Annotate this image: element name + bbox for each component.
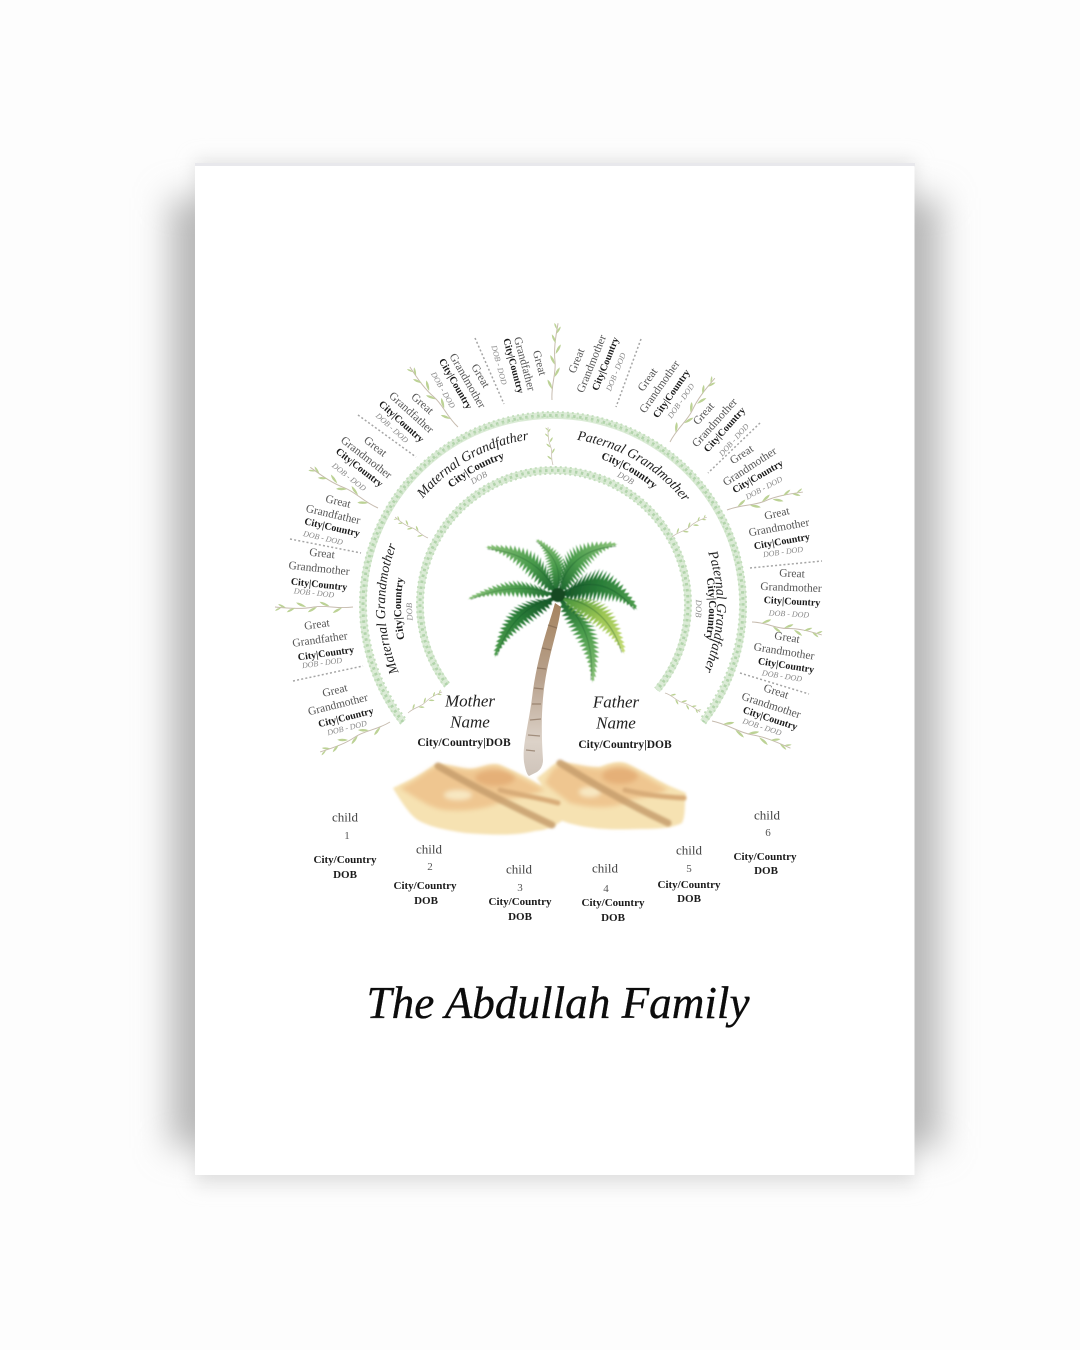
great grandparent 15: Great <box>773 630 801 646</box>
great grandparent 5 <box>330 434 394 493</box>
great grandparent 6: DOB - DOD <box>373 410 410 445</box>
poster shadow <box>170 160 940 1185</box>
great grandparent 15: City|Country <box>757 656 815 676</box>
great grandparent 14: Great <box>779 568 806 580</box>
great grandparent 7: City|Country <box>436 357 474 411</box>
great grandparent 12: Great <box>728 443 757 467</box>
child 1: 1 <box>344 830 350 842</box>
grandparent: maternal grandmother: City|Country <box>394 578 406 640</box>
grandparent: maternal grandfather: DOB <box>470 472 488 484</box>
child 3: DOB <box>508 911 533 923</box>
child 2: DOB <box>414 895 439 907</box>
great grandparent 8: City|Country <box>500 337 526 395</box>
child 4: child <box>592 860 618 876</box>
child 2: child <box>416 842 442 856</box>
parent: mother: City/Country|DOB <box>417 737 511 749</box>
grandparent: paternal grandmother: City|Country <box>602 453 657 488</box>
parent: mother: Name <box>449 712 490 732</box>
grandparent: maternal grandmother <box>376 543 413 674</box>
child 1: DOB <box>333 869 358 881</box>
great grandparent 14: Grandmother <box>760 581 822 595</box>
grandparent: paternal grandmother: Paternal Grandmother <box>576 431 689 500</box>
great grandparent 11: City|Country <box>702 405 748 455</box>
child 4: 4 <box>603 883 609 895</box>
grandparent: maternal grandfather: City|Country <box>448 454 503 486</box>
palm trunk <box>524 603 561 776</box>
great grandparent 8: Grandfather <box>511 336 537 393</box>
great grandparent 11: Great <box>691 400 718 428</box>
great grandparent 14: DOB - DOD <box>768 608 810 620</box>
great grandparent 2 <box>292 617 355 670</box>
great grandparent 2: City|Country <box>297 645 355 663</box>
great grandparent 14: City|Country <box>763 595 821 609</box>
child 2 <box>394 842 457 907</box>
great grandparent 2: Great <box>304 617 331 633</box>
parent: father: Name <box>595 714 636 732</box>
great grandparent 2: Grandfather <box>292 630 349 650</box>
great grandparent 9: Great <box>567 346 588 375</box>
great grandparent 8 <box>489 336 548 395</box>
great grandparent 7 <box>428 351 492 411</box>
great grandparent 4 <box>301 493 362 547</box>
great grandparent 5: City|Country <box>333 446 385 490</box>
great grandparent 1: City|Country <box>317 706 375 730</box>
child 6 <box>734 808 797 877</box>
great grandparent 10: Great <box>636 365 661 394</box>
great grandparent 9: Grandmother <box>575 333 609 395</box>
grandparent: paternal grandfather: Paternal Grandfather <box>705 551 726 673</box>
child 5: City/Country <box>658 879 721 891</box>
child 4: DOB <box>601 912 626 924</box>
great grandparent 10: DOB - DOD <box>665 382 696 421</box>
grandparent: maternal grandmother: DOB <box>406 603 413 620</box>
great grandparent 11: Grandmother <box>690 396 740 450</box>
great grandparent 12: City|Country <box>731 458 785 496</box>
great grandparent 1: DOB - DOD <box>325 719 368 737</box>
child 5: child <box>676 842 702 858</box>
child 2: City/Country <box>394 880 457 892</box>
child 5: DOB <box>677 893 702 905</box>
great grandparent 13: Great <box>763 505 792 523</box>
great grandparent 8: Great <box>530 349 548 378</box>
great grandparent 16: Great <box>762 682 791 702</box>
child 6: City/Country <box>734 851 797 863</box>
parent: mother: Mother <box>444 692 495 710</box>
child 6: DOB <box>754 865 779 877</box>
child 5 <box>658 842 721 905</box>
great grandparent 9: City|Country <box>590 336 622 392</box>
great grandparent 9 <box>567 333 628 395</box>
child 2: 2 <box>427 861 433 873</box>
great grandparent 8: DOB - DOD <box>489 343 509 386</box>
great grandparent 12: Grandmother <box>721 445 779 489</box>
great grandparent 12 <box>721 443 785 502</box>
great grandparent 13 <box>748 505 811 559</box>
great grandparent 6: Grandfather <box>386 390 436 436</box>
great grandparent 13: DOB - DOD <box>761 545 804 559</box>
child 3: City/Country <box>489 896 552 908</box>
child 5: 5 <box>686 863 692 875</box>
sprig dividers <box>275 323 823 757</box>
child 3 <box>489 862 552 923</box>
great grandparent 3: DOB - DOD <box>292 586 335 600</box>
grandparent: paternal grandmother: DOB <box>616 472 634 484</box>
illustration: sand dunes <box>393 762 686 835</box>
great grandparent 15 <box>753 630 815 684</box>
great grandparent 16 <box>740 682 802 738</box>
illustration: palm tree <box>467 523 644 776</box>
great grandparent 16: City|Country <box>741 705 799 733</box>
poster card <box>195 163 915 1175</box>
palm fronds <box>467 523 644 685</box>
great grandparent 15: Grandmother <box>753 641 815 663</box>
dotted dividers <box>290 338 822 694</box>
great grandparent 4: City|Country <box>303 516 361 540</box>
great grandparent 10: Grandmother <box>637 358 683 416</box>
child 1 <box>314 810 377 881</box>
outer garland ring <box>360 412 746 724</box>
great grandparent 11: DOB - DOD <box>716 422 751 459</box>
title: The Abdullah Family <box>366 977 750 1028</box>
great grandparent 1: Great <box>321 682 350 700</box>
grandparent: paternal grandfather: DOB <box>696 600 702 618</box>
parent: father: City/Country|DOB <box>578 739 672 751</box>
great grandparent 16: DOB - DOD <box>740 716 783 738</box>
child 6: 6 <box>765 827 771 839</box>
great grandparent 10 <box>636 358 696 421</box>
family tree fan <box>275 323 822 756</box>
great grandparent 14 <box>760 568 822 620</box>
great grandparent 3: Great <box>309 547 336 561</box>
great grandparent 3: City|Country <box>290 577 348 593</box>
great grandparent 4: DOB - DOD <box>301 529 344 547</box>
child 3: 3 <box>517 882 523 894</box>
great grandparent 2: DOB - DOD <box>300 656 343 670</box>
great grandparent 3: Grandmother <box>288 560 350 578</box>
grandparent: maternal grandfather: Maternal Grandfather <box>417 433 528 499</box>
child 1: City/Country <box>314 854 377 866</box>
great grandparent 7: Great <box>468 362 492 391</box>
grandparent: maternal grandmother: Maternal Grandmother <box>376 543 399 674</box>
great grandparent 13: Grandmother <box>748 517 810 539</box>
great grandparent 7: Grandmother <box>446 351 488 411</box>
great grandparent 6: Great <box>408 391 436 418</box>
great grandparent 13: City|Country <box>753 532 811 552</box>
great grandparent 15: DOB - DOD <box>760 668 803 684</box>
great grandparent 12: DOB - DOD <box>743 474 784 502</box>
great grandparent 5: Great <box>361 434 389 460</box>
child 3: child <box>506 862 532 876</box>
child 4: City/Country <box>582 897 645 909</box>
great grandparent 1: Grandmother <box>307 692 369 718</box>
great grandparent 5: Grandmother <box>338 434 394 482</box>
grandparent: paternal grandfather: City|Country <box>704 578 716 640</box>
great grandparent 3 <box>288 547 350 600</box>
parent: father <box>578 692 672 751</box>
great grandparent 9: DOB - DOD <box>604 351 628 393</box>
inner garland ring <box>417 467 691 692</box>
great grandparent 6: City|Country <box>376 399 426 445</box>
great grandparent 16: Grandmother <box>740 691 802 721</box>
great grandparent 1 <box>307 682 375 737</box>
great grandparent 4: Grandfather <box>305 503 362 527</box>
child 4 <box>582 860 645 924</box>
parent: father: Father <box>592 692 640 712</box>
great grandparent 6 <box>373 390 436 445</box>
child 6: child <box>754 808 780 822</box>
child 1: child <box>332 810 358 824</box>
great grandparent 7: DOB - DOD <box>428 369 457 410</box>
parent: mother <box>417 692 511 749</box>
great grandparent 5: DOB - DOD <box>330 460 368 493</box>
great grandparent 10: City|Country <box>651 368 693 420</box>
great grandparent 4: Great <box>324 493 353 511</box>
